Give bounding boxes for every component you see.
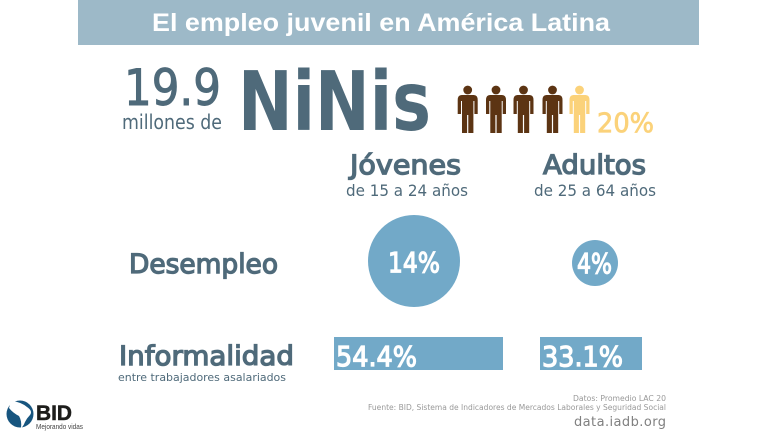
column heading: Adultos: de 25 a 64 años <box>534 181 656 200</box>
circle: adult unemployment: 4% <box>577 247 612 280</box>
logo: BID <box>6 400 83 431</box>
headline figure: 19.9 millones de: 19.9 <box>124 59 221 117</box>
column heading: Jóvenes <box>346 150 468 200</box>
row label: Desempleo: Desempleo <box>129 249 278 280</box>
row label: Informalidad: entre trabajadores asalariados <box>118 371 286 384</box>
source notes <box>368 394 666 430</box>
source notes: Datos: Promedio LAC 20 <box>573 394 666 403</box>
bar: adult informality: 33.1% <box>542 340 623 373</box>
column heading: Jóvenes: de 15 a 24 años <box>346 181 468 200</box>
icon: brown people <box>458 86 562 133</box>
headline figure: 19.9 millones de <box>122 59 222 134</box>
title banner <box>78 0 699 45</box>
row label: Informalidad <box>118 341 294 384</box>
column heading: Jóvenes: Jóvenes <box>348 150 461 181</box>
circle: adult unemployment <box>572 240 618 286</box>
logo: BID: Mejorando vidas <box>36 424 83 431</box>
bar: youth informality <box>334 337 503 373</box>
source notes: Fuente: BID, Sistema de Indicadores de Mercados Laborales y Seguridad Social <box>368 403 666 412</box>
pictogram: 4 of 5 people, 20% highlighted <box>458 86 654 139</box>
headline figure: 19.9 millones de: millones de <box>122 110 222 134</box>
headline word: NiNis: NiNis <box>238 55 431 150</box>
bar: youth informality: 54.4% <box>336 340 417 373</box>
title banner: El empleo juvenil en América Latina <box>152 9 611 37</box>
row label: Informalidad: Informalidad <box>119 341 294 372</box>
source notes: data.iadb.org <box>574 415 666 430</box>
pictogram value: 20% <box>597 108 654 139</box>
icon: globe <box>6 400 34 428</box>
column heading: Adultos: Adultos <box>543 150 646 181</box>
logo: BID: BID <box>36 402 72 425</box>
circle: youth unemployment: 14% <box>388 246 440 279</box>
column heading: Adultos <box>534 150 656 200</box>
circle: youth unemployment <box>368 215 460 307</box>
icon: yellow person <box>570 86 590 133</box>
